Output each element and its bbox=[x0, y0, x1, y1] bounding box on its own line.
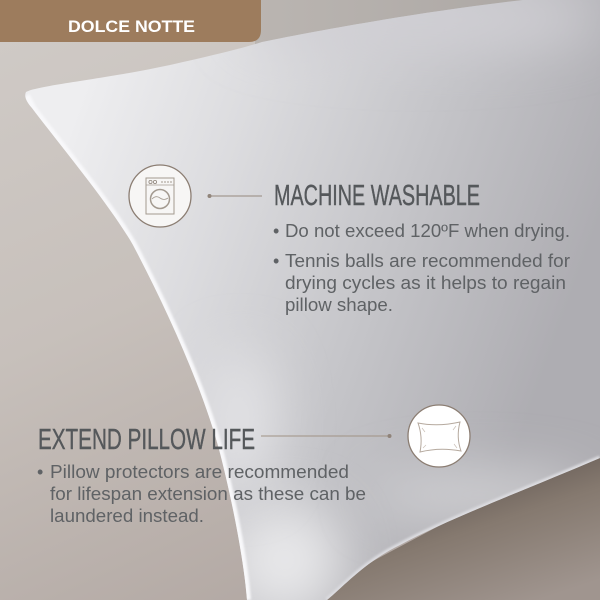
text block: pillow life notes: Pillow protectors are recommended bbox=[50, 462, 349, 482]
text block: washable notes: • bbox=[273, 251, 279, 271]
text block: pillow life notes: • bbox=[37, 462, 43, 482]
background: surface behind pillow top bbox=[255, 0, 600, 60]
text block: washable notes: • bbox=[273, 221, 279, 241]
heading: extend pillow life: EXTEND PILLOW LIFE bbox=[38, 424, 255, 456]
text block: pillow life notes: laundered instead. bbox=[50, 506, 204, 526]
brand tab bbox=[0, 0, 261, 42]
text block: washable notes: drying cycles as it helps to regain bbox=[285, 273, 566, 293]
brand name: DOLCE NOTTE bbox=[68, 18, 195, 36]
connector: washable bbox=[208, 194, 262, 198]
pillow seam bbox=[26, 96, 247, 600]
icon: washing machine bbox=[129, 165, 191, 227]
background: dark floor below pillow bbox=[300, 440, 600, 600]
icon: pillow bbox=[408, 405, 470, 467]
text block: washable notes bbox=[273, 221, 570, 315]
text block: washable notes: Do not exceed 120ºF when drying. bbox=[285, 221, 570, 241]
text block: washable notes: pillow shape. bbox=[285, 295, 393, 315]
heading: machine washable: MACHINE WASHABLE bbox=[274, 180, 480, 212]
connector: pillow life bbox=[261, 434, 392, 438]
text block: washable notes: Tennis balls are recommended for bbox=[285, 251, 570, 271]
text block: pillow life notes: for lifespan extension as these can be bbox=[50, 484, 366, 504]
text block: pillow life notes bbox=[37, 462, 366, 526]
